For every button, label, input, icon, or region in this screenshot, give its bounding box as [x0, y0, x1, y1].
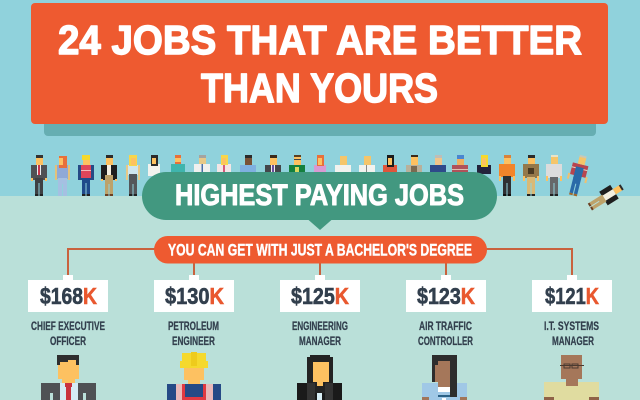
job title: IT systems manager: MANAGER — [552, 334, 594, 348]
worker 3: hard hat with vest — [78, 155, 94, 196]
figure: CEO — [41, 355, 96, 400]
heading pill: highest paying jobs: HIGHEST PAYING JOBS — [175, 179, 464, 212]
job title: chief executive officer: OFFICER — [50, 334, 86, 348]
worker 10: blue scrubs — [240, 155, 256, 174]
figure: IT systems manager — [544, 355, 599, 400]
salary card: IT systems manager — [532, 275, 612, 312]
worker 15: white coat with grey lapel — [359, 156, 375, 174]
job title: air traffic controller: CONTROLLER — [418, 334, 473, 348]
worker 16: red top, black hair — [383, 155, 397, 174]
figure: air traffic controller — [422, 355, 467, 400]
connector lines — [68, 249, 572, 275]
worker 19: plaid shirt, blue cap — [452, 155, 468, 174]
worker 7: green scrubs — [171, 155, 185, 174]
worker 9: blonde woman — [217, 155, 231, 174]
worker 11: dark suit — [265, 155, 281, 174]
worker 17: apron — [406, 155, 422, 174]
subheading pill — [154, 236, 487, 264]
worker 22: brown t-shirt — [523, 155, 539, 196]
salary card: IT systems manager: $121K — [545, 283, 599, 309]
worker 24: tilted farmer in overalls — [563, 153, 593, 198]
title banner: 24 JOBS THAT ARE BETTER — [58, 17, 582, 63]
row of workers — [31, 153, 626, 214]
worker 14: white coat, blond — [335, 156, 351, 174]
worker 1: grey suit — [31, 155, 47, 196]
job title: petroleum engineer: ENGINEER — [172, 334, 215, 348]
job title: IT systems manager: I.T. SYSTEMS — [544, 319, 599, 333]
worker 20: blonde, dark jacket — [477, 155, 491, 174]
title banner: THAN YOURS — [201, 65, 438, 111]
worker 21: orange polo — [499, 155, 515, 196]
salary card: CEO — [28, 275, 108, 312]
title banner — [31, 3, 608, 136]
worker 23: grey t-shirt — [546, 155, 562, 196]
salary card: engineering manager — [280, 275, 360, 312]
heading pill: highest paying jobs — [142, 172, 497, 230]
job title: engineering manager: ENGINEERING — [292, 319, 348, 333]
job title: chief executive officer: CHIEF EXECUTIVE — [31, 319, 105, 333]
salary card: engineering manager: $125K — [291, 283, 349, 309]
salary card: CEO: $168K — [40, 283, 97, 309]
job title: engineering manager: MANAGER — [299, 334, 341, 348]
job title: petroleum engineer: PETROLEUM — [168, 319, 219, 333]
job title: IT systems manager — [544, 319, 599, 348]
worker 5: blonde, light top — [126, 155, 140, 196]
salary card: air traffic controller — [406, 275, 486, 312]
salary card: air traffic controller: $123K — [417, 283, 475, 309]
worker 18: navy uniform, grey hair — [430, 155, 446, 174]
worker lying on the ground — [586, 180, 626, 214]
figure: petroleum engineer — [167, 352, 221, 400]
salary card: petroleum engineer — [154, 275, 234, 312]
job title: air traffic controller — [418, 319, 473, 348]
job title: air traffic controller: AIR TRAFFIC — [419, 319, 472, 333]
salary card: petroleum engineer: $130K — [165, 283, 224, 309]
worker 4: black jacket, khaki trousers — [101, 155, 117, 196]
job title: chief executive officer — [31, 319, 105, 348]
job title: engineering manager — [292, 319, 348, 348]
subheading pill: YOU CAN GET WITH JUST A BACHELOR'S DEGREE — [168, 242, 472, 260]
worker 6: white coat — [148, 155, 160, 176]
worker 13: pink top, red hair — [314, 155, 326, 174]
figure: engineering manager — [297, 355, 342, 400]
job title: petroleum engineer — [168, 319, 219, 348]
worker 2: scrubs, red hair — [55, 156, 70, 196]
worker 8: white shirt with blue tie — [194, 155, 210, 174]
worker 12: green t-shirt — [289, 155, 305, 174]
